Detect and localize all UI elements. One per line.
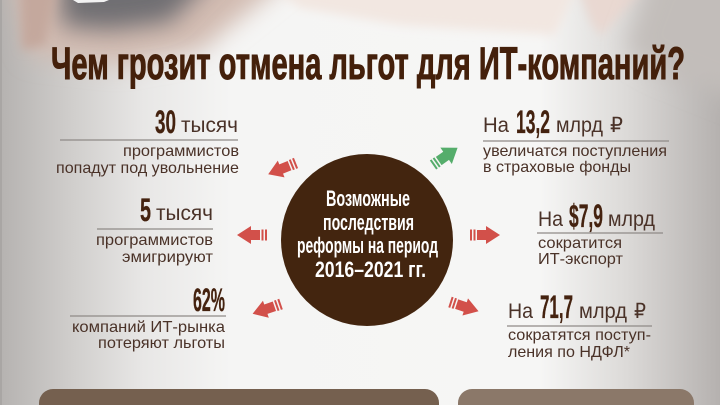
item: 13,2 млрд: в страховые фонды <box>483 159 631 176</box>
item: 5 тысяч <box>96 192 214 266</box>
item: 13,2 млрд: увеличатся поступления <box>483 143 667 160</box>
item: 5 тысяч: программистов <box>96 232 213 249</box>
circle text: Возможные <box>326 186 410 211</box>
item: 62%: 62% <box>193 282 225 318</box>
bottom panel: right <box>458 389 694 405</box>
item: $7,9 млрд: сократится <box>538 235 622 252</box>
circle text: последствия <box>323 210 414 235</box>
arrow: to $7,9 <box>470 226 500 244</box>
item: $7,9 млрд <box>537 198 663 268</box>
item: 13,2 млрд: 13,2 <box>516 104 550 140</box>
item: 71,7 млрд <box>507 289 652 361</box>
item: 30 тысяч: 30 <box>155 104 176 140</box>
item: 71,7 млрд: ₽ <box>634 300 646 323</box>
item: 5 тысяч: 5 <box>140 192 151 228</box>
circle text: реформы на период <box>297 233 438 258</box>
item: 71,7 млрд: На <box>508 300 533 323</box>
item: 5 тысяч: эмигрируют <box>122 249 214 266</box>
item: 5 тысяч: тысяч <box>156 202 213 225</box>
item: $7,9 млрд: На <box>538 208 563 231</box>
item: 30 тысяч: программистов <box>123 143 239 160</box>
item: 13,2 млрд: На <box>483 114 509 137</box>
arrow: to 71,7 <box>447 293 481 320</box>
photo fragment: paper corner <box>73 0 109 3</box>
circle text: 2016–2021 гг. <box>315 257 426 282</box>
arrow: to 30 тысяч <box>265 155 299 183</box>
arrow: to 5 тысяч <box>237 226 267 244</box>
central circle <box>281 154 453 326</box>
item: 71,7 млрд: ления по НДФЛ* <box>508 344 630 361</box>
bottom panel: left <box>39 389 439 405</box>
item: $7,9 млрд: $7,9 <box>569 198 603 234</box>
item: 71,7 млрд: сократятся поступ- <box>508 327 651 344</box>
item: 71,7 млрд: 71,7 <box>540 289 573 325</box>
item: 30 тысяч: тысяч <box>181 114 238 137</box>
item: $7,9 млрд: ИТ-экспорт <box>538 251 624 268</box>
arrow: up green <box>427 140 463 173</box>
item: 30 тысяч: попадут под увольнение <box>56 160 239 177</box>
item: 71,7 млрд: млрд <box>579 300 627 323</box>
item: 62%: потеряют льготы <box>98 335 225 352</box>
item: 13,2 млрд: млрд <box>556 114 603 137</box>
item: $7,9 млрд: млрд <box>608 208 655 231</box>
item: 62% <box>70 282 226 352</box>
item: 13,2 млрд <box>483 104 669 176</box>
item: 30 тысяч <box>56 104 239 177</box>
arrow: to 62% <box>250 295 284 322</box>
circle text <box>297 186 438 282</box>
item: 13,2 млрд: ₽ <box>610 114 623 137</box>
item: 62%: компаний ИТ-рынка <box>72 319 225 336</box>
